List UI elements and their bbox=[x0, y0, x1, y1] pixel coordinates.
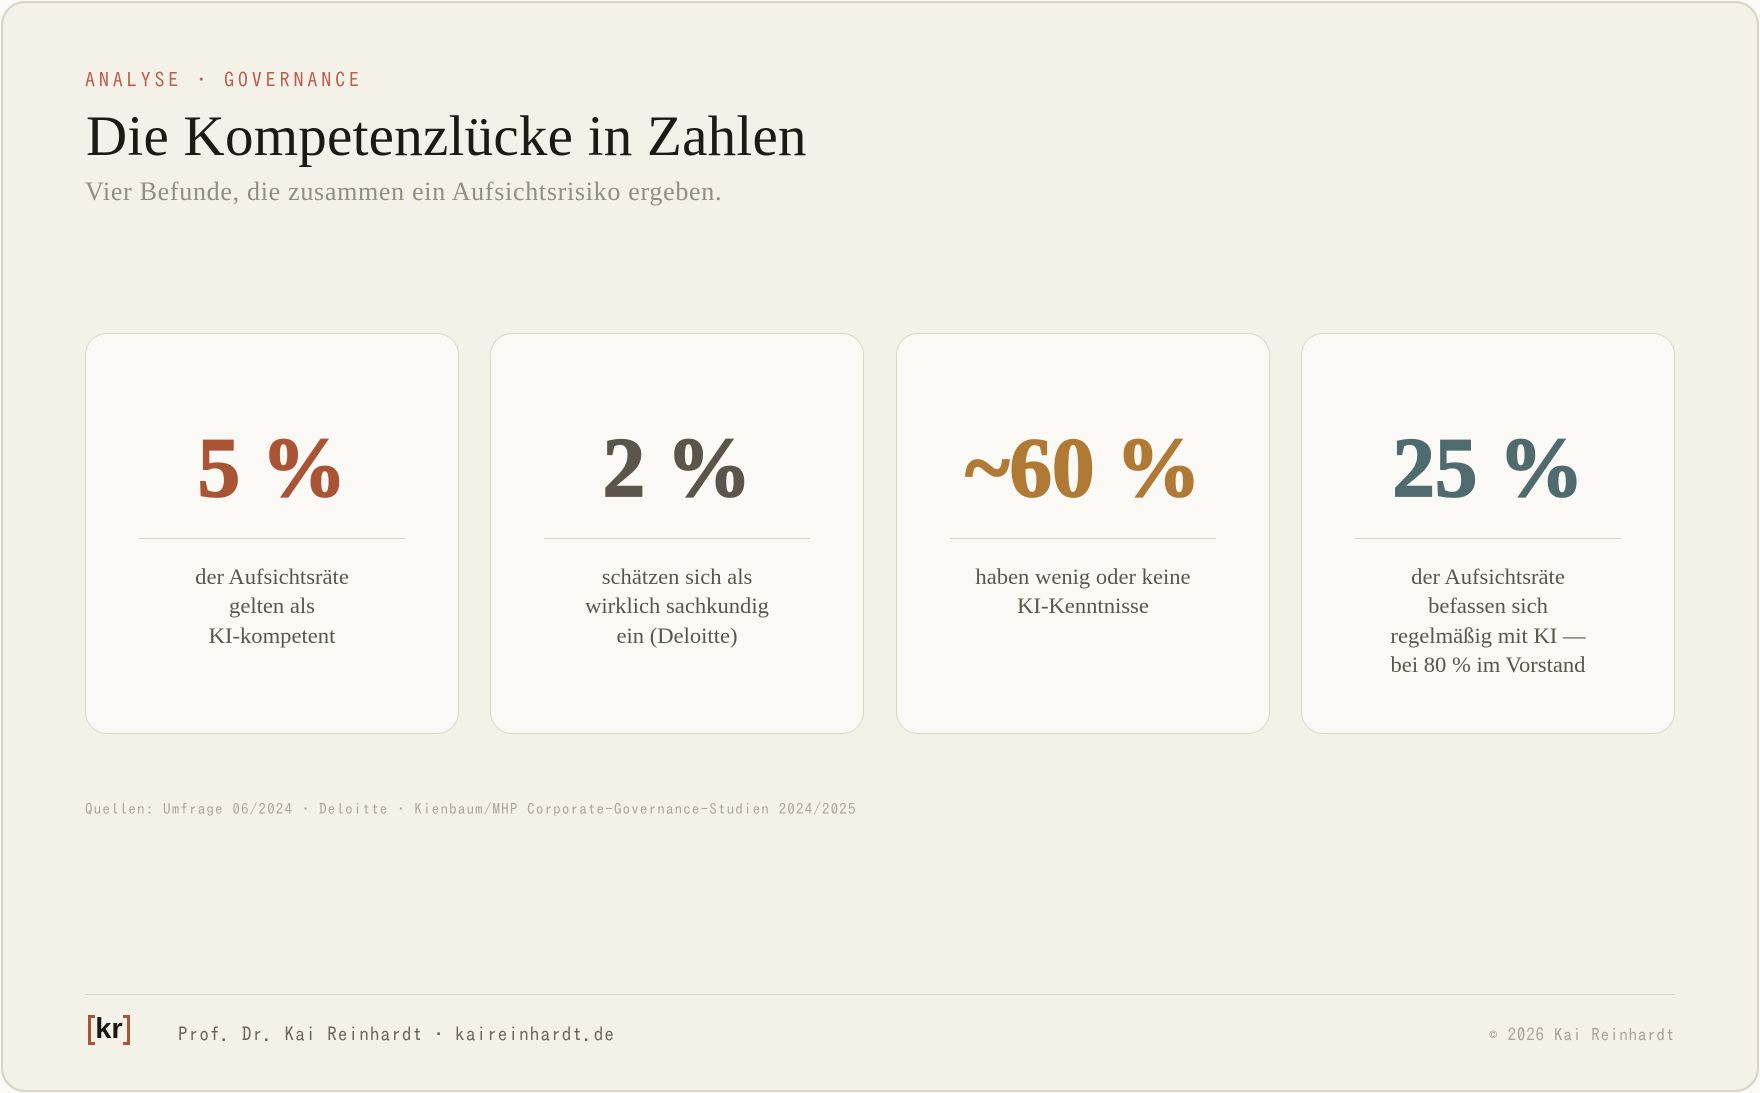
label: gelten als bbox=[229, 593, 315, 618]
subtitle: Vier Befunde, die zusammen ein Aufsichtsrisiko ergeben. bbox=[85, 177, 722, 206]
label: der Aufsichtsräte bbox=[195, 564, 349, 589]
label: regelmäßig mit KI — bbox=[1390, 623, 1586, 648]
number: 2 % bbox=[603, 421, 751, 515]
eyebrow: ANALYSE · GOVERNANCE bbox=[85, 70, 363, 90]
label bbox=[1390, 564, 1586, 677]
source note: Quellen: Umfrage 06/2024 · Deloitte · Kienbaum/MHP Corporate-Governance-Studien 2024/2025 bbox=[85, 801, 857, 816]
number: 25 % bbox=[1392, 421, 1584, 515]
label: KI-kompetent bbox=[209, 623, 335, 648]
footer author: Prof. Dr. Kai Reinhardt · kaireinhardt.de bbox=[178, 1025, 615, 1044]
number: ~60 % bbox=[965, 421, 1201, 515]
label: wirklich sachkundig bbox=[585, 593, 769, 618]
label bbox=[195, 564, 349, 648]
label: der Aufsichtsräte bbox=[1411, 564, 1565, 589]
label: befassen sich bbox=[1428, 593, 1548, 618]
label: bei 80 % im Vorstand bbox=[1390, 652, 1585, 677]
label: schätzen sich als bbox=[602, 564, 752, 589]
copyright: © 2026 Kai Reinhardt bbox=[1489, 1027, 1675, 1044]
card: 25 % bbox=[1301, 333, 1675, 734]
number: 5 % bbox=[198, 421, 346, 515]
card: 2 % bbox=[490, 333, 864, 734]
label bbox=[975, 564, 1191, 618]
label: haben wenig oder keine bbox=[975, 564, 1191, 589]
label bbox=[585, 564, 769, 648]
label: ein (Deloitte) bbox=[616, 623, 738, 648]
title: Die Kompetenzlücke in Zahlen bbox=[86, 105, 807, 168]
logo: kr bbox=[95, 1013, 123, 1045]
card: 5 % bbox=[85, 333, 459, 734]
card: ~60 % bbox=[896, 333, 1270, 734]
label: KI-Kenntnisse bbox=[1017, 593, 1149, 618]
logo bbox=[88, 1013, 130, 1045]
